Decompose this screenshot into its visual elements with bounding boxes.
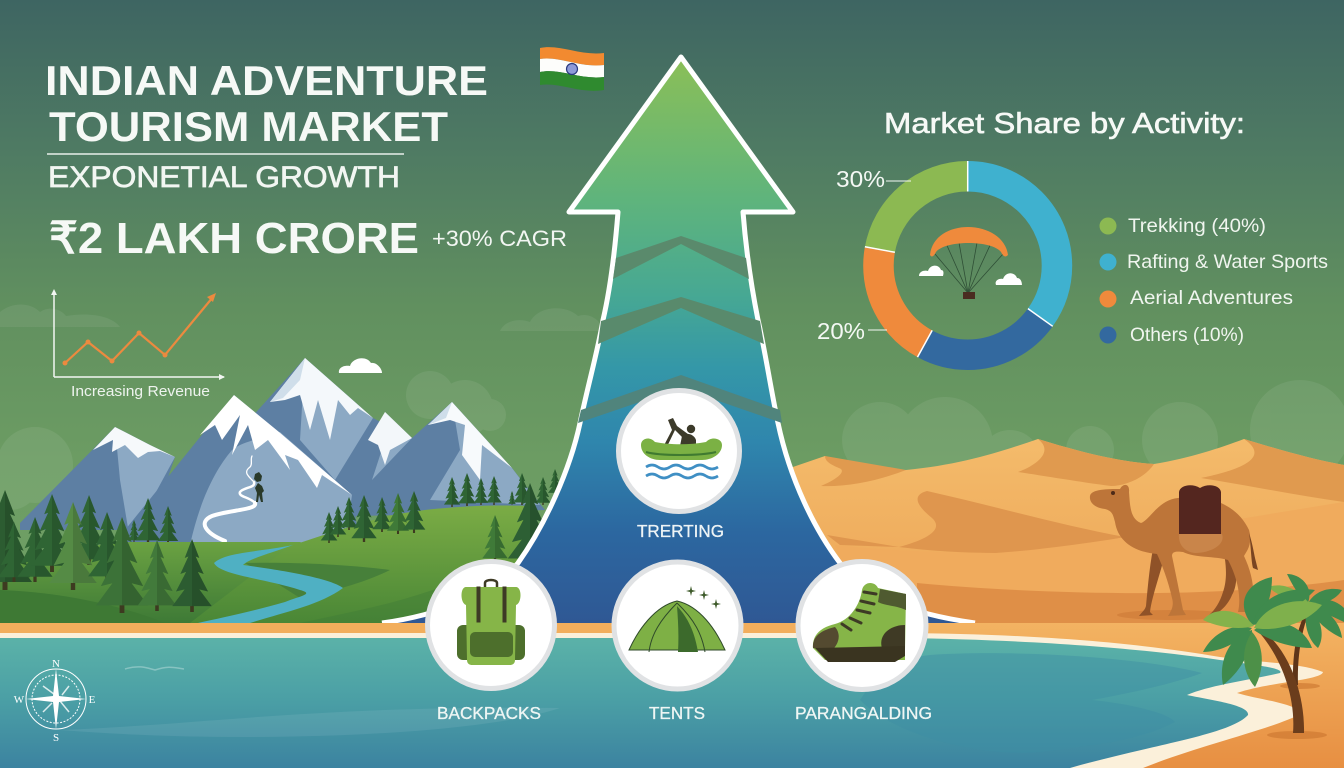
left ground [0, 542, 320, 623]
camel [1090, 485, 1258, 620]
right hill [190, 505, 535, 623]
back mountain [240, 358, 545, 520]
river [198, 545, 343, 623]
CAGR: +30% CAGR [432, 226, 567, 251]
desert dunes [790, 439, 1344, 623]
icon: paraglider [919, 227, 1022, 299]
beach strip [0, 623, 1344, 633]
legend [1100, 215, 1328, 346]
compass rose: S [53, 732, 59, 744]
lower dune shadow [917, 580, 1344, 623]
arrow chevron 1 [613, 236, 749, 279]
revenue line chart: Increasing Revenue [71, 383, 210, 400]
hikers [254, 472, 264, 502]
arrow chevron 2 [598, 297, 764, 344]
tree clusters [0, 483, 552, 613]
back mountain snow [270, 358, 373, 440]
label: TRERTING: TRERTING [637, 521, 724, 541]
water [0, 638, 1281, 768]
30% label: 30% [836, 166, 885, 192]
legend: Others (10%) [1130, 324, 1244, 346]
icon: backpack [457, 580, 525, 665]
boot circle [798, 562, 926, 690]
legend: Trekking (40%) [1128, 215, 1266, 237]
hills and river [0, 469, 562, 623]
kayak circle [618, 390, 740, 512]
label: PARANGALDING: PARANGALDING [795, 703, 932, 723]
dune shadow large [899, 491, 1125, 553]
main palm crown [1203, 577, 1322, 687]
dune shadow right [1201, 439, 1344, 502]
arrow chevron 3 [578, 375, 782, 423]
foam shoreline [0, 633, 1323, 768]
lower dune band [835, 502, 1344, 623]
icon: boot [813, 583, 906, 662]
mountains [20, 358, 545, 545]
compass rose: E [89, 694, 96, 706]
title [45, 57, 488, 150]
palm trees [1203, 574, 1344, 739]
icon: Indian flag [540, 47, 604, 91]
compass rose: W [14, 694, 25, 706]
label: BACKPACKS: BACKPACKS [437, 703, 541, 723]
20% label: 20% [817, 318, 865, 344]
revenue line chart [51, 289, 225, 400]
right peak snow [428, 402, 512, 480]
centre mountain [125, 395, 360, 545]
right sand [900, 623, 1344, 768]
white cloud [339, 358, 382, 373]
compass rose [14, 658, 96, 744]
icon: kayak [641, 418, 722, 478]
arrow outline [382, 57, 975, 623]
left mountain [20, 427, 175, 530]
dune shadow centre [1018, 439, 1154, 486]
label: TENTS: TENTS [649, 703, 705, 723]
water shading [60, 653, 1202, 753]
tent circle [614, 562, 741, 689]
title: INDIAN ADVENTURE [45, 57, 488, 104]
legend: Rafting & Water Sports [1127, 251, 1328, 273]
subtitle: EXPONETIAL GROWTH [48, 161, 400, 194]
camel far legs [1139, 540, 1236, 616]
growth arrow [382, 57, 975, 623]
legend: Aerial Adventures [1130, 287, 1293, 309]
main dune body [790, 439, 1344, 623]
compass rose: N [52, 658, 60, 670]
far palm crown [1268, 574, 1344, 648]
camel saddle [1179, 485, 1221, 534]
camel belly [1179, 534, 1223, 553]
market value: ₹2 LAKH CRORE [49, 214, 419, 263]
title: TOURISM MARKET [49, 103, 448, 150]
faint background clouds [0, 304, 1344, 510]
mountain trail [205, 456, 255, 541]
donut chart [817, 161, 1057, 357]
camel body [1090, 485, 1253, 616]
far trees [128, 469, 562, 544]
dune shadow left [821, 456, 906, 486]
backpack circle [428, 562, 554, 688]
market share heading: Market Share by Activity: [884, 108, 1245, 140]
arrow body [382, 57, 975, 623]
icon: tent [629, 586, 725, 652]
